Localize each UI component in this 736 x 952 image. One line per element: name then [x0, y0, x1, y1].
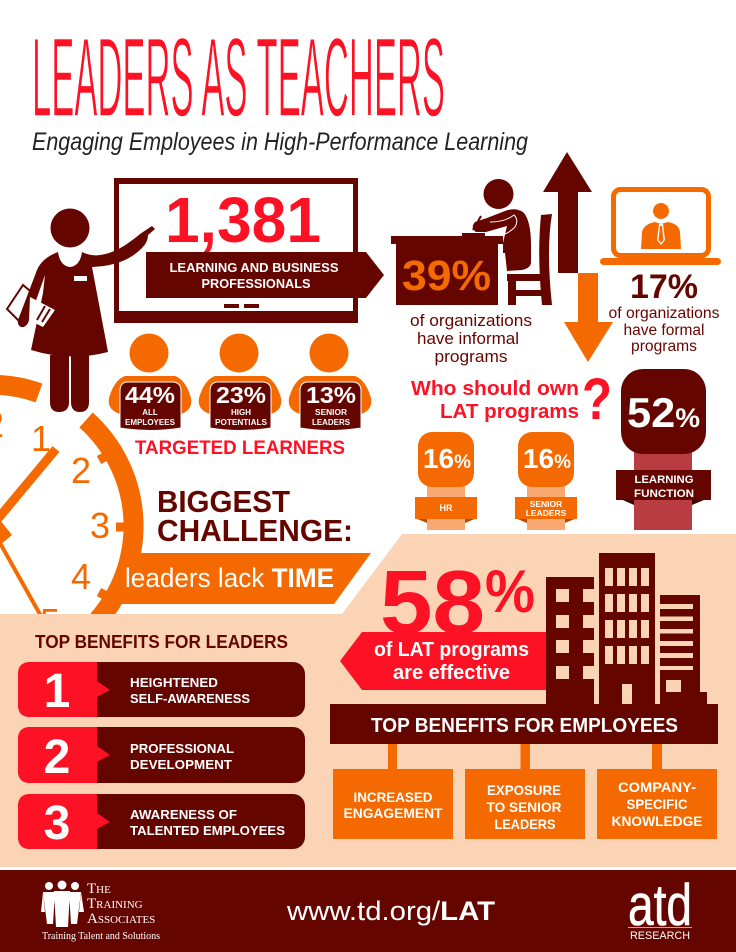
flag: senior leaders 16 percent: [515, 432, 577, 530]
stat: 17 percent formal programs: programs: [631, 338, 697, 355]
stat: 17 percent formal programs: have formal: [624, 322, 704, 339]
benefit 3: 3: [44, 797, 70, 850]
benefit 2: DEVELOPMENT: [130, 758, 232, 772]
clock illustration: 3: [90, 505, 110, 546]
subtitle: Engaging Employees in High-Performance Learning: [32, 128, 528, 156]
box: company-specific knowledge: [597, 769, 717, 839]
footer band: [0, 870, 736, 952]
targeted learners: high potentials: POTENTIALS: [215, 418, 268, 427]
header bar: TOP BENEFITS FOR EMPLOYEES: [371, 715, 678, 737]
targeted learners: all employees: EMPLOYEES: [125, 418, 176, 427]
benefit 2: 2: [44, 731, 70, 784]
box: increased engagement: INCREASED: [354, 789, 432, 805]
flag: learning function 52 percent: LEARNING: [634, 474, 694, 486]
box: increased engagement: [333, 769, 453, 839]
icon: three people: [41, 880, 84, 927]
box: exposure to senior leaders: [465, 769, 585, 839]
box: company-specific knowledge: COMPANY-: [618, 779, 696, 795]
targeted learners: all employees: ALL: [142, 408, 158, 417]
box: exposure to senior leaders: EXPOSURE: [487, 782, 561, 798]
clock illustration: 5: [40, 601, 60, 642]
banner: learning and business professionals: PROFESSIONALS: [202, 277, 310, 291]
flag: learning function 52 percent: [616, 369, 711, 530]
benefit 1: [18, 662, 305, 718]
heading: who should own LAT programs: ?: [582, 367, 612, 432]
logo: the training associates: [41, 880, 160, 942]
targeted learners: high potentials: [199, 334, 281, 430]
banner: learning and business professionals: LEARNING AND BUSINESS: [170, 261, 338, 275]
desk with 39 percent: 39%: [402, 252, 491, 300]
flag: HR 16 percent: HR: [440, 503, 453, 513]
stat: 58 percent: 58: [380, 553, 485, 653]
heading: biggest challenge: [157, 484, 353, 548]
section: top benefits for employees: [330, 704, 718, 839]
heading: targeted learners: TARGETED LEARNERS: [135, 438, 345, 459]
flag: HR 16 percent: [415, 432, 477, 530]
icon: teacher figure: [7, 208, 155, 412]
box: exposure to senior leaders: LEADERS: [494, 816, 556, 832]
benefit 2: PROFESSIONAL: [130, 742, 234, 756]
chair: [539, 214, 552, 305]
targeted learners: high potentials: 23%: [216, 382, 266, 408]
flag: senior leaders 16 percent: 16%: [523, 443, 571, 474]
box: company-specific knowledge: SPECIFIC: [626, 796, 688, 812]
clock illustration: 2: [71, 450, 91, 491]
flag: senior leaders 16 percent: SENIOR: [530, 499, 562, 509]
heading: biggest challenge: CHALLENGE:: [157, 513, 353, 548]
logo: the training associates: ASSOCIATES: [87, 911, 155, 927]
flag: senior leaders 16 percent: LEADERS: [526, 508, 567, 518]
header bar: [330, 704, 718, 744]
logo: atd research: RESEARCH: [630, 930, 690, 942]
box: company-specific knowledge: KNOWLEDGE: [612, 813, 702, 829]
stat: 17 percent formal programs: 17%: [630, 268, 698, 306]
icon: office buildings: [546, 553, 707, 705]
stat: 17 percent formal programs: of organizations: [608, 305, 720, 322]
heading: biggest challenge: BIGGEST: [157, 484, 290, 519]
logo: the training associates: Training Talent and Solutions: [42, 931, 160, 942]
text: informal programs: [410, 311, 532, 366]
arrow banner: of LAT programs are effective: are effective: [393, 662, 510, 684]
clock illustration: [0, 385, 134, 642]
benefit 3: AWARENESS OF: [130, 808, 237, 822]
targeted learners: senior leaders: LEADERS: [312, 418, 351, 427]
text: informal programs: of organizations: [410, 311, 532, 330]
targeted learners: senior leaders: [289, 334, 371, 430]
targeted learners: all employees: [109, 334, 191, 430]
ribbon: leaders lack time: [108, 553, 371, 604]
heading: TOP BENEFITS FOR LEADERS: [35, 632, 288, 652]
section: top benefits for leaders: [18, 632, 305, 850]
benefit 1: SELF-AWARENESS: [130, 692, 250, 706]
desk with 39 percent: [391, 236, 503, 305]
targeted learners: all employees: 44%: [125, 382, 175, 408]
heading: who should own LAT programs: LAT programs: [440, 401, 579, 423]
icon: laptop with presenter: [600, 190, 721, 265]
targeted learners: senior leaders: SENIOR: [315, 408, 347, 417]
benefit 3: TALENTED EMPLOYEES: [130, 824, 285, 838]
presentation screen: [114, 178, 384, 323]
arrow banner: of LAT programs are effective: [340, 632, 546, 690]
heading: who should own LAT programs: [411, 367, 612, 432]
arrow: down: [564, 273, 613, 362]
logo: the training associates: THE: [87, 881, 111, 897]
targeted learners: senior leaders: 13%: [306, 382, 356, 408]
clock illustration: 4: [71, 556, 91, 597]
footer url: www.td.org/ LAT: [286, 896, 496, 926]
benefit 2: [18, 727, 305, 784]
flag: HR 16 percent: 16%: [423, 443, 471, 474]
ribbon: leaders lack time: leaders lack TIME: [125, 563, 334, 593]
stat: 17 percent formal programs: [608, 268, 720, 355]
stat: 58 percent: %: [485, 558, 535, 625]
benefit 1: HEIGHTENED: [130, 676, 218, 690]
stat: 58 percent: [380, 553, 535, 653]
benefit 3: [18, 794, 305, 850]
benefit 1: 1: [44, 665, 70, 718]
arrow: up: [543, 152, 592, 273]
box: increased engagement: ENGAGEMENT: [344, 805, 443, 821]
flag: learning function 52 percent: FUNCTION: [634, 488, 694, 500]
peach background panel: [0, 534, 736, 867]
big number 1,381: 1,381: [165, 184, 321, 256]
heading: who should own LAT programs: Who should own: [411, 378, 579, 400]
banner: learning and business professionals: [146, 252, 384, 298]
clock illustration: 1: [31, 418, 51, 459]
flag: learning function 52 percent: 52%: [627, 389, 700, 436]
targeted learners: high potentials: HIGH: [231, 408, 251, 417]
box: exposure to senior leaders: TO SENIOR: [486, 799, 562, 815]
text: informal programs: programs: [434, 347, 508, 366]
text: informal programs: have informal: [417, 329, 519, 348]
icon: person at desk: [391, 179, 552, 305]
arrow banner: of LAT programs are effective: of LAT programs: [374, 639, 529, 661]
logo: the training associates: TRAINING: [87, 896, 143, 912]
logo: atd research: atd: [628, 873, 692, 938]
